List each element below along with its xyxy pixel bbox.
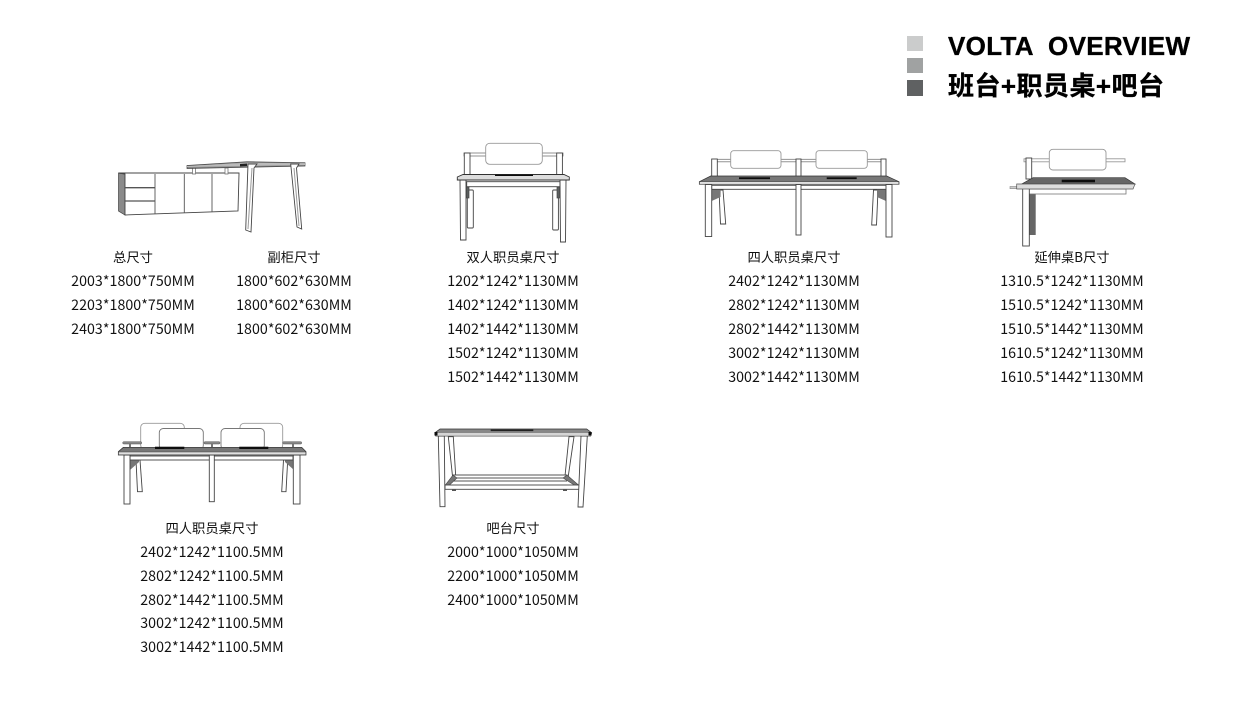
spec text: side cabinet size: 1800*602*630MM xyxy=(236,295,352,315)
product illustration: two-person staff desk xyxy=(457,143,569,242)
spec text: two-person staff desk: 1502*1442*1130MM xyxy=(447,367,579,387)
spec text: extension desk B xyxy=(1000,247,1144,387)
spec text: extension desk B: 延伸桌B尺寸 xyxy=(1034,247,1110,266)
spec text: executive desk total size: 2403*1800*750MM xyxy=(71,319,195,339)
title: chinese: 班台+职员桌+吧台 xyxy=(948,71,1164,101)
spec text: two-person staff desk: 1202*1242*1130MM xyxy=(447,271,579,291)
spec text: side cabinet size: 1800*602*630MM xyxy=(236,271,352,291)
product illustration: bar table xyxy=(434,429,592,507)
spec text: four-person staff desk xyxy=(728,247,860,387)
product illustration: executive desk with side cabinet xyxy=(118,162,305,232)
spec text: two-person staff desk: 1402*1242*1130MM xyxy=(447,295,579,315)
spec text: extension desk B: 1510.5*1442*1130MM xyxy=(1000,319,1144,339)
spec text: bar table: 2200*1000*1050MM xyxy=(447,566,579,586)
spec text: executive desk total size xyxy=(71,247,195,339)
spec text: bar table: 2400*1000*1050MM xyxy=(447,590,579,610)
spec text: extension desk B: 1310.5*1242*1130MM xyxy=(1000,271,1144,291)
legend square: mid grey xyxy=(907,58,923,73)
spec text: four-person staff desk: 四人职员桌尺寸 xyxy=(747,247,841,266)
spec text: four-person staff desk: 2802*1242*1130MM xyxy=(728,295,860,315)
spec text: four-person staff desk: 3002*1242*1130MM xyxy=(728,343,860,363)
legend square: light grey xyxy=(907,36,923,51)
spec text: bar table xyxy=(447,518,579,610)
spec text: four-person staff desk: 2402*1242*1130MM xyxy=(728,271,860,291)
product illustration: four-person staff desk, front view xyxy=(699,151,899,237)
spec text: four-person staff desk with screens: 3002*1442*1100.5MM xyxy=(140,637,284,657)
spec text: side cabinet size: 副柜尺寸 xyxy=(267,247,321,266)
spec text: side cabinet size xyxy=(236,247,352,339)
title: english: VOLTA OVERVIEW xyxy=(948,31,1190,61)
spec text: four-person staff desk: 2802*1442*1130MM xyxy=(728,319,860,339)
spec text: four-person staff desk with screens: 2802*1442*1100.5MM xyxy=(140,590,284,610)
spec text: executive desk total size: 2203*1800*750MM xyxy=(71,295,195,315)
spec text: four-person staff desk with screens: 2402*1242*1100.5MM xyxy=(140,542,284,562)
spec text: side cabinet size: 1800*602*630MM xyxy=(236,319,352,339)
spec text: bar table: 2000*1000*1050MM xyxy=(447,542,579,562)
header xyxy=(907,31,1190,101)
spec text: two-person staff desk xyxy=(447,247,579,387)
spec text: two-person staff desk: 1402*1442*1130MM xyxy=(447,319,579,339)
spec text: executive desk total size: 2003*1800*750MM xyxy=(71,271,195,291)
spec text: four-person staff desk with screens: 3002*1242*1100.5MM xyxy=(140,613,284,633)
spec text: extension desk B: 1610.5*1242*1130MM xyxy=(1000,343,1144,363)
spec text: bar table: 吧台尺寸 xyxy=(486,518,540,537)
spec text: four-person staff desk: 3002*1442*1130MM xyxy=(728,367,860,387)
spec text: four-person staff desk with screens: 2802*1242*1100.5MM xyxy=(140,566,284,586)
spec text: two-person staff desk: 双人职员桌尺寸 xyxy=(466,247,560,266)
spec text: executive desk total size: 总尺寸 xyxy=(113,247,153,266)
spec text: extension desk B: 1510.5*1242*1130MM xyxy=(1000,295,1144,315)
spec text: extension desk B: 1610.5*1442*1130MM xyxy=(1000,367,1144,387)
spec text: four-person staff desk with screens xyxy=(140,518,284,657)
spec text: four-person staff desk with screens: 四人职员桌尺寸 xyxy=(165,518,259,537)
product illustration: four-person staff desk with screens xyxy=(118,423,306,504)
spec text: two-person staff desk: 1502*1242*1130MM xyxy=(447,343,579,363)
legend square: dark grey xyxy=(907,80,923,96)
product illustration: extension desk B xyxy=(1010,149,1135,246)
